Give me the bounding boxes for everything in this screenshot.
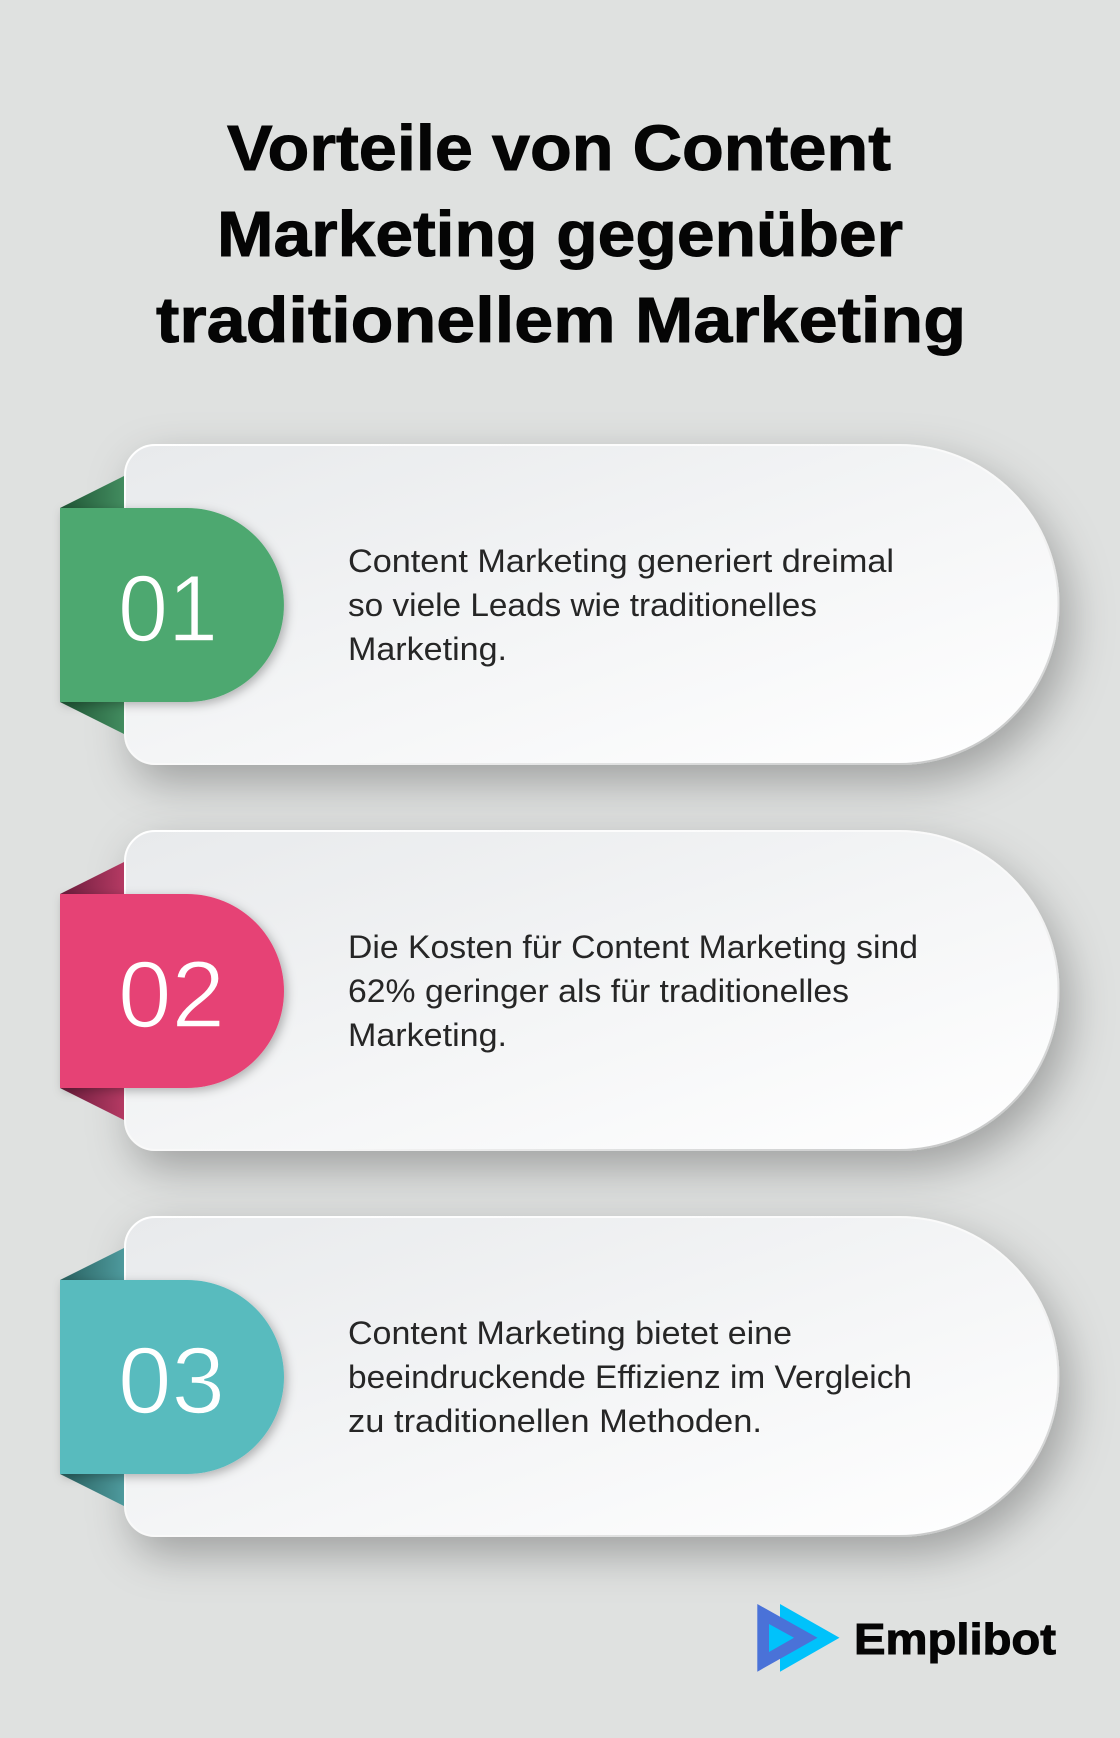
card 02 number badge: 02 <box>118 942 225 1048</box>
card 03 text: beeindruckende Effizienz im Vergleich <box>348 1359 912 1395</box>
panel: card 01 <box>60 445 1058 764</box>
panel: card 03 <box>60 1217 1058 1536</box>
card 02 text: Die Kosten für Content Marketing sind <box>348 929 918 965</box>
card 03 ribbon folds <box>60 1248 124 1506</box>
title <box>156 112 966 356</box>
title: traditionellem Marketing <box>156 284 966 356</box>
wordmark: Emplibot <box>854 1615 1056 1664</box>
card 03 number badge: 03 <box>118 1328 225 1434</box>
title: Marketing gegenüber <box>217 198 903 270</box>
card 02 text <box>348 929 918 1053</box>
card 02 number badge <box>60 894 284 1088</box>
icon: play triangles <box>757 1604 840 1672</box>
card 01 text: Marketing. <box>348 631 507 667</box>
card 01 number badge <box>60 508 284 702</box>
card 02 text: Marketing. <box>348 1017 507 1053</box>
card 02 text: 62% geringer als für traditionelles <box>348 973 849 1009</box>
card 01 text: so viele Leads wie traditionelles <box>348 587 817 623</box>
card 01 text: Content Marketing generiert dreimal <box>348 543 894 579</box>
card 02 ribbon folds <box>60 862 124 1120</box>
card 03 text <box>348 1315 912 1439</box>
card 02 background <box>125 831 1058 1150</box>
card 03 text: Content Marketing bietet eine <box>348 1315 792 1351</box>
panel: card 02 <box>60 831 1058 1150</box>
logo: Emplibot <box>757 1604 1056 1672</box>
card 03 background <box>125 1217 1058 1536</box>
card 01 number badge: 01 <box>118 556 218 662</box>
card 03 text: zu traditionellen Methoden. <box>348 1403 762 1439</box>
title: Vorteile von Content <box>227 112 891 184</box>
card 01 ribbon folds <box>60 476 124 734</box>
card 01 text <box>348 543 894 667</box>
card 01 background <box>125 445 1058 764</box>
card 03 number badge <box>60 1280 284 1474</box>
